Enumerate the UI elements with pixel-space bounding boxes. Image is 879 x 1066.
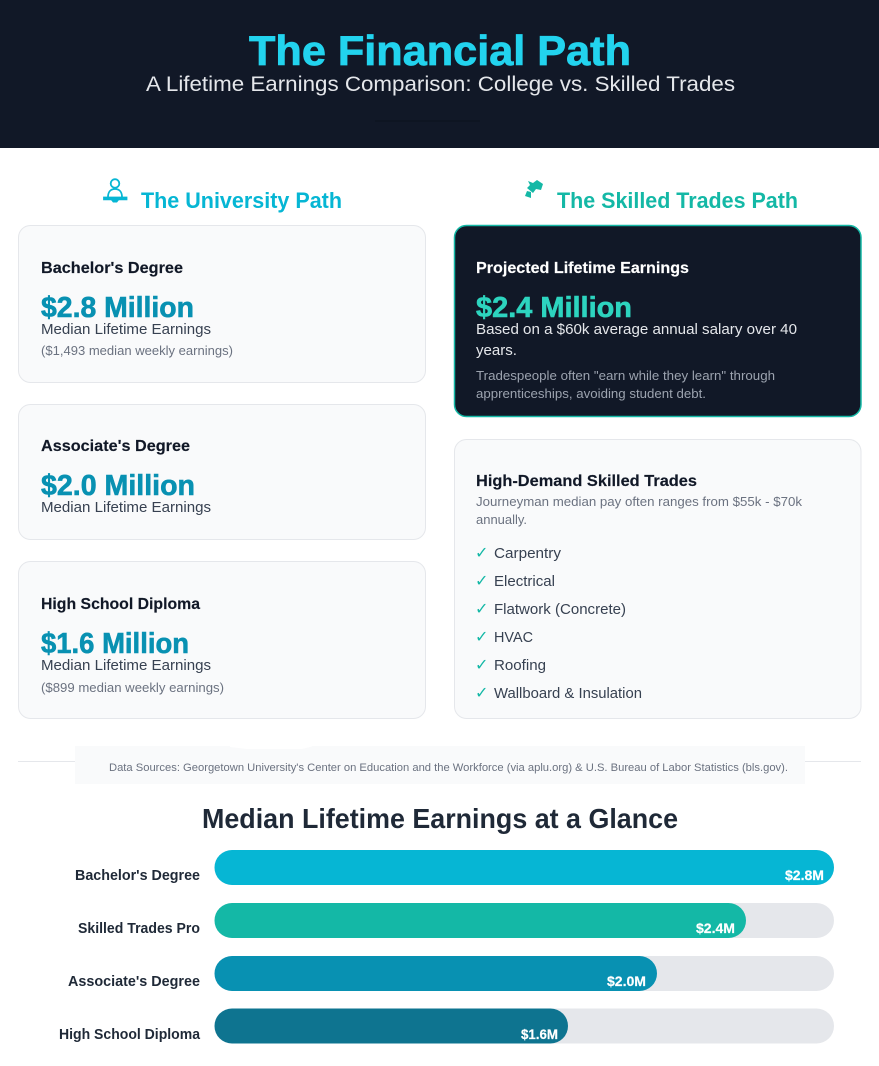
icon: hammer bbox=[525, 180, 543, 198]
list of trades: ✓ bbox=[475, 655, 488, 674]
panel: high school diploma: ($899 median weekly earnings) bbox=[41, 680, 224, 695]
panel: associate's degree: Median Lifetime Earnings bbox=[41, 500, 211, 516]
panel: projected lifetime earnings: years. bbox=[476, 343, 517, 359]
list of trades: ✓ bbox=[475, 627, 488, 646]
panel: associate's degree: $2.0 Million bbox=[41, 470, 195, 502]
skilled trades path heading: The Skilled Trades Path bbox=[557, 188, 798, 213]
list of trades: Flatwork (Concrete) bbox=[494, 602, 626, 618]
data sources footnote bbox=[75, 745, 805, 784]
icon: graduate with laptop bbox=[104, 179, 126, 202]
panel: projected lifetime earnings bbox=[454, 226, 861, 416]
bar: bachelor's degree: $2.8M bbox=[785, 868, 824, 883]
bar: high school diploma: $1.6M bbox=[521, 1027, 558, 1042]
list of trades: Roofing bbox=[494, 658, 546, 674]
data sources footnote: Data Sources: Georgetown University's Center on Education and the Workforce (via aplu.org) & U.S. Bureau of Labor Statistics (bls.gov). bbox=[109, 762, 788, 774]
skilled trades path heading bbox=[525, 180, 798, 213]
panel: high-demand skilled trades: High-Demand Skilled Trades bbox=[476, 473, 697, 490]
panel: projected lifetime earnings: Tradespeople often "earn while they learn" through bbox=[476, 368, 775, 383]
bar: skilled trades pro bbox=[78, 903, 834, 938]
panel: projected lifetime earnings: Based on a $60k average annual salary over 40 bbox=[476, 322, 797, 338]
bar: skilled trades pro: $2.4M bbox=[696, 921, 735, 936]
panel: bachelor's degree: $2.8 Million bbox=[41, 292, 194, 324]
bar: associate's degree: Associate's Degree bbox=[68, 974, 200, 990]
bar: high school diploma: High School Diploma bbox=[59, 1027, 201, 1043]
list of trades: Carpentry bbox=[494, 546, 562, 562]
list of trades: Electrical bbox=[494, 574, 555, 590]
university path heading: The University Path bbox=[141, 188, 342, 213]
list of trades: Wallboard & Insulation bbox=[494, 686, 642, 702]
panel: high-demand skilled trades: annually. bbox=[476, 512, 527, 527]
panel: projected lifetime earnings: Projected Lifetime Earnings bbox=[476, 260, 689, 277]
subtitle: A Lifetime Earnings Comparison: College vs. Skilled Trades bbox=[146, 71, 735, 96]
panel: bachelor's degree: Median Lifetime Earnings bbox=[41, 322, 211, 338]
bar chart bbox=[59, 850, 834, 1044]
bar: high school diploma bbox=[59, 1008, 834, 1044]
panel: high school diploma: $1.6 Million bbox=[41, 628, 189, 660]
panel: high-demand skilled trades bbox=[454, 440, 861, 718]
panel: projected lifetime earnings: $2.4 Million bbox=[476, 292, 632, 324]
university path heading bbox=[104, 179, 342, 213]
panel: associate's degree bbox=[18, 404, 426, 540]
list of trades: ✓ bbox=[475, 599, 488, 618]
panel: high school diploma: High School Diploma bbox=[41, 596, 200, 613]
bar: skilled trades pro: Skilled Trades Pro bbox=[78, 921, 200, 937]
panel: bachelor's degree: ($1,493 median weekly earnings) bbox=[41, 343, 233, 358]
panel: associate's degree: Associate's Degree bbox=[41, 438, 190, 455]
panel: bachelor's degree bbox=[18, 226, 426, 382]
header banner bbox=[0, 0, 879, 148]
bar: associate's degree: $2.0M bbox=[607, 974, 646, 989]
list of trades: ✓ bbox=[475, 571, 488, 590]
list of trades: ✓ bbox=[475, 543, 488, 562]
list of trades: ✓ bbox=[475, 683, 488, 702]
chart title: Median Lifetime Earnings at a Glance bbox=[202, 803, 678, 834]
bar: bachelor's degree bbox=[75, 850, 834, 885]
bar: associate's degree bbox=[68, 956, 834, 991]
panel: high school diploma bbox=[18, 562, 426, 718]
panel: bachelor's degree: Bachelor's Degree bbox=[41, 260, 183, 277]
list of trades bbox=[475, 543, 642, 702]
list of trades: HVAC bbox=[494, 630, 533, 646]
panel: high-demand skilled trades: Journeyman median pay often ranges from $55k - $70k bbox=[476, 494, 803, 509]
bar: bachelor's degree: Bachelor's Degree bbox=[75, 868, 200, 884]
panel: projected lifetime earnings: apprenticeships, avoiding student debt. bbox=[476, 386, 706, 401]
panel: high school diploma: Median Lifetime Earnings bbox=[41, 658, 211, 674]
title: The Financial Path bbox=[249, 27, 631, 74]
